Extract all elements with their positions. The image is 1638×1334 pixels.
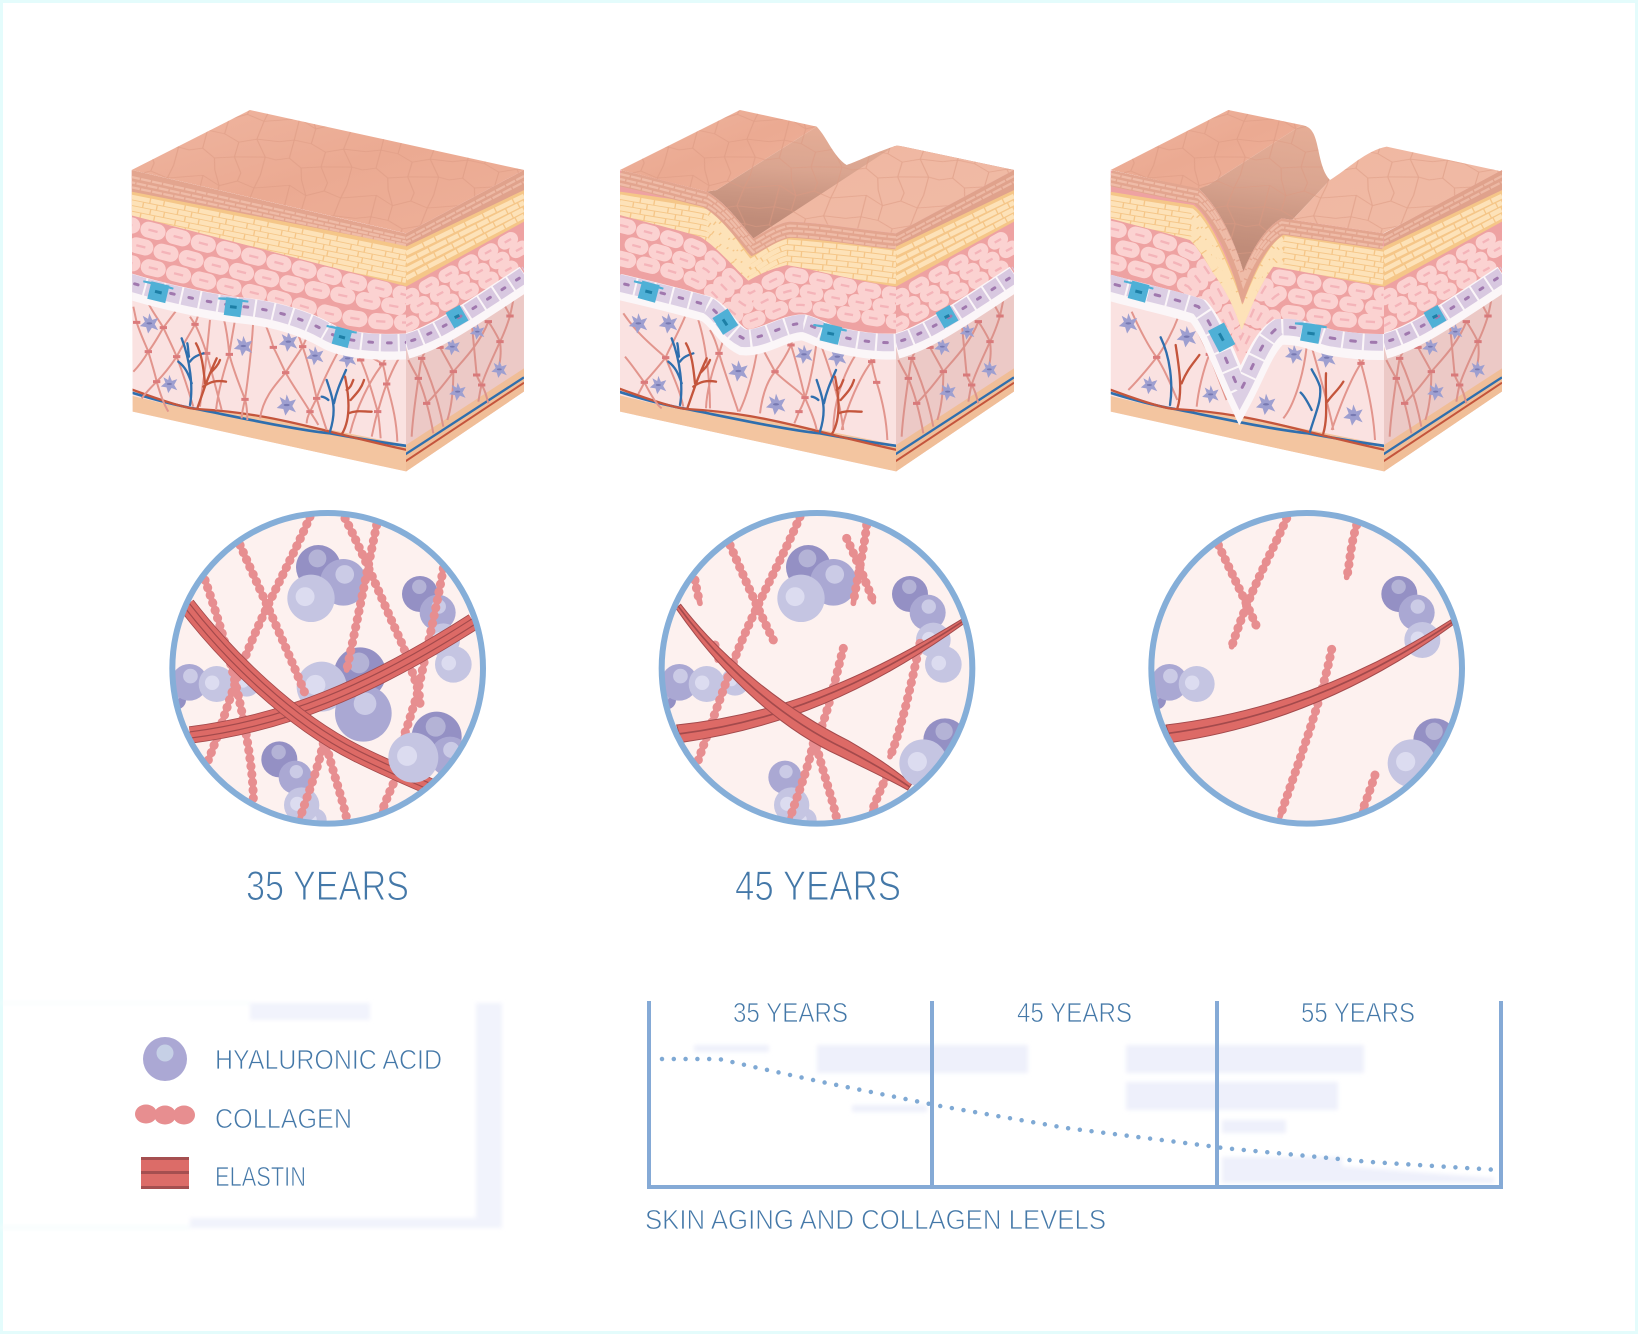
skin surface [132,110,524,233]
front face layers [613,169,900,472]
chart caption: SKIN AGING AND COLLAGEN LEVELS [645,1204,1106,1235]
elastin fibre [1166,620,1453,742]
chart: skin aging and collagen levels [645,997,1501,1235]
dotted collagen line [662,1059,1498,1170]
legend background smudges [0,1002,502,1229]
collagen strands [205,517,443,818]
skin block: 45 years [613,110,1017,472]
magnified circle: 45 years [657,512,974,832]
chart frame [649,1001,1501,1187]
label: 35 years: 35 YEARS [246,862,409,909]
chart column label: 55 years: 55 YEARS [1301,997,1415,1028]
skin surface with deep wrinkle [1111,110,1503,272]
elastin fibres [676,604,963,790]
skin surface with shallow wrinkle [620,110,1014,238]
front face layers [123,169,410,472]
collagen strands [1218,518,1375,817]
side face layers [892,170,1017,472]
collagen strands [695,517,920,818]
hyaluronic acid bubbles [167,545,472,832]
chart column label: 35 years: 35 YEARS [733,997,848,1028]
icon: collagen [135,1104,195,1124]
chart column label: 45 years: 45 YEARS [1017,997,1132,1028]
legend text: hyaluronic acid: HYALURONIC ACID [215,1044,442,1075]
skin block: 35 years [123,110,527,472]
legend text: elastin: ELASTIN [215,1161,306,1192]
icon: hyaluronic acid [143,1037,187,1081]
legend panel [0,1002,502,1229]
front face layers [1103,169,1390,472]
legend text: collagen: COLLAGEN [215,1103,352,1134]
magnified circle: 55 years [1147,512,1463,825]
label: 45 years: 45 YEARS [735,862,901,909]
hyaluronic acid bubbles [657,545,967,832]
magnified circle: 35 years [167,512,484,832]
skin block: 55 years [1103,110,1505,472]
side face layers [1380,170,1505,472]
elastin fibres [187,605,473,787]
chart background smudges [694,1045,1494,1183]
hyaluronic acid bubbles [1147,576,1457,787]
icon: elastin [141,1157,189,1189]
side face layers [402,170,527,472]
